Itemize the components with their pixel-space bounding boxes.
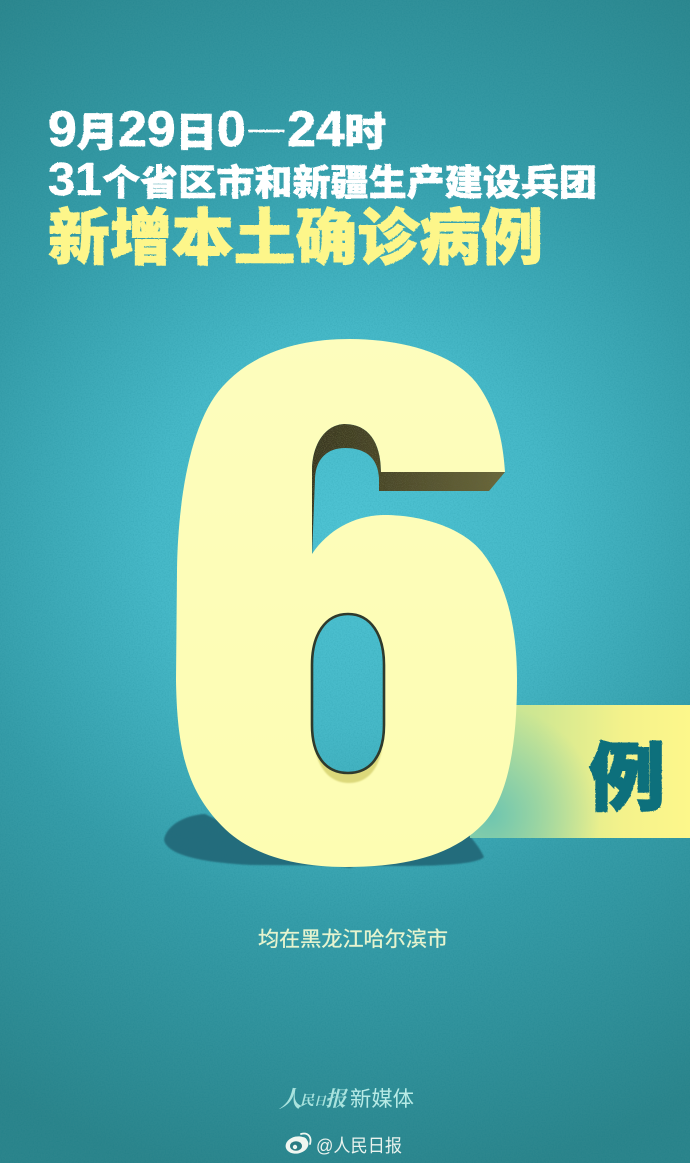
calligraphic masthead — [279, 1081, 349, 1114]
watermark — [284, 1134, 402, 1156]
new media text: 新媒体 — [350, 1088, 414, 1111]
location note: 均在黑龙江哈尔滨市 — [258, 928, 448, 951]
counter shading — [314, 740, 383, 783]
title line: new local cases: 新增本土确诊病例 — [48, 188, 543, 277]
inner 3D shading of the upper notch — [312, 424, 505, 556]
calligraphic masthead: 日 — [314, 1092, 327, 1109]
title block — [48, 100, 597, 277]
counter outline — [312, 614, 384, 773]
icon: weibo — [284, 1134, 311, 1156]
source logo — [279, 1081, 414, 1114]
calligraphic masthead: 人 — [279, 1081, 302, 1114]
unit label: 例 — [589, 719, 665, 826]
calligraphic masthead: 报 — [325, 1083, 349, 1113]
ground shadow of the number — [164, 814, 484, 868]
weibo handle: @人民日报 — [316, 1136, 402, 1156]
title line: date: 9月29日0—24时 — [48, 100, 386, 158]
yellow label band — [470, 705, 690, 838]
big number 6 — [176, 339, 517, 867]
numeral face — [176, 339, 517, 867]
calligraphic masthead: 民 — [300, 1090, 315, 1110]
title line: regions: 31个省区市和新疆生产建设兵团 — [48, 153, 597, 206]
